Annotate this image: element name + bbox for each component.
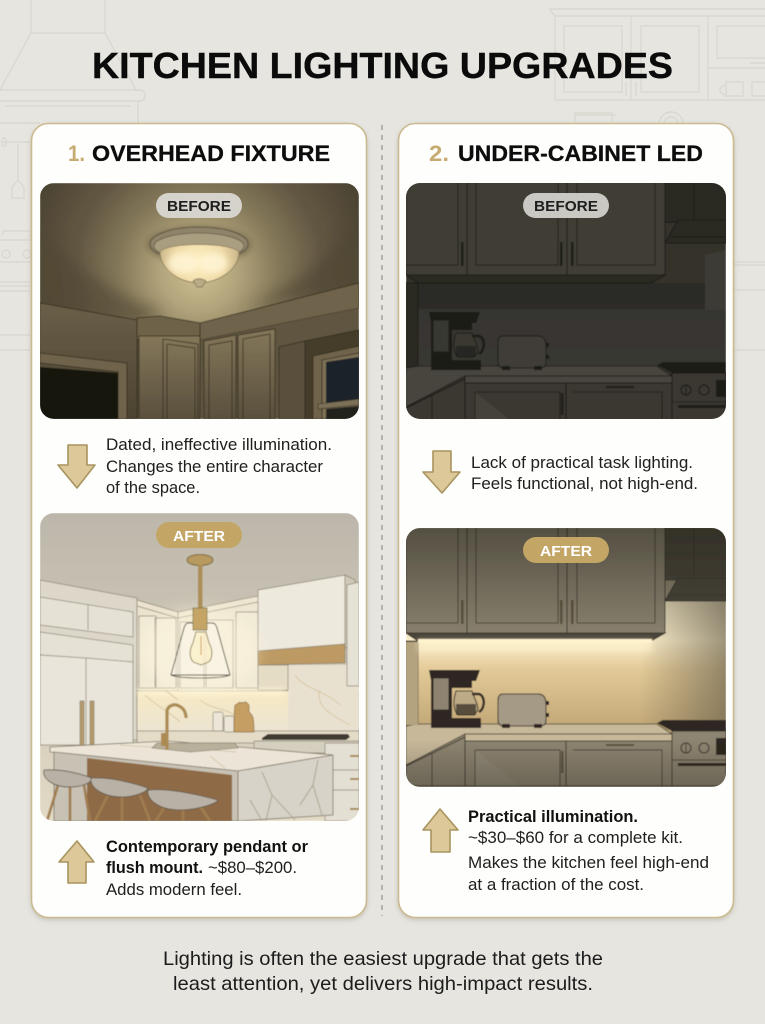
- footer takeaway: least attention, yet delivers high-impact results.: [173, 973, 593, 995]
- image: dated ceiling fixture, before: [40, 183, 359, 419]
- before label: [156, 193, 242, 218]
- icon: up arrow: [423, 809, 458, 852]
- text: before description: [106, 435, 332, 497]
- text: after description: Contemporary pendant or: [106, 837, 308, 856]
- dashed divider between panels: [381, 125, 383, 916]
- after label: AFTER: [173, 528, 225, 545]
- panel heading: 1.: [68, 141, 85, 166]
- panel heading: UNDER-CABINET LED: [458, 141, 703, 166]
- panel card background: [32, 124, 366, 918]
- panel card background: [398, 124, 734, 918]
- icon: down arrow: [423, 451, 460, 493]
- text: after description: ~$30–$60 for a complete kit.: [468, 828, 683, 847]
- text: before description: Dated, ineffective illumination.: [106, 435, 332, 454]
- panel heading: 2.: [429, 141, 449, 166]
- image: contemporary pendant kitchen, after: [40, 513, 359, 821]
- text: before description: Changes the entire character: [106, 457, 323, 476]
- text: before description: [471, 453, 698, 493]
- before label: BEFORE: [167, 198, 231, 215]
- background kitchen line art: [0, 0, 765, 350]
- text: after description: Adds modern feel.: [106, 880, 242, 899]
- icon: up arrow: [59, 841, 94, 883]
- text: after description: [106, 837, 308, 899]
- icon: down arrow: [58, 445, 95, 488]
- after label: [523, 537, 609, 563]
- after label: AFTER: [540, 543, 592, 560]
- before label: [523, 193, 609, 218]
- text: after description: ~$80–$200.: [208, 858, 297, 877]
- panel: under-cabinet LED: [398, 124, 734, 918]
- text: before description: of the space.: [106, 478, 200, 497]
- footer takeaway: Lighting is often the easiest upgrade that gets the: [163, 948, 603, 970]
- image: lit backsplash with LED strip, after: [406, 523, 726, 787]
- text: after description: [468, 807, 709, 894]
- image: dark countertop, before: [406, 183, 726, 419]
- title: KITCHEN LIGHTING UPGRADES: [92, 45, 673, 86]
- before label: BEFORE: [534, 198, 598, 215]
- text: after description: Makes the kitchen feel high-end: [468, 853, 709, 872]
- panel: overhead fixture: [32, 124, 366, 918]
- panel heading: OVERHEAD FIXTURE: [92, 141, 330, 166]
- text: after description: flush mount.: [106, 858, 203, 877]
- text: after description: at a fraction of the cost.: [468, 875, 644, 894]
- text: before description: Lack of practical task lighting.: [471, 453, 693, 472]
- footer takeaway: [163, 948, 603, 995]
- after label: [156, 522, 242, 548]
- text: after description: Practical illumination.: [468, 807, 638, 826]
- text: before description: Feels functional, not high-end.: [471, 474, 698, 493]
